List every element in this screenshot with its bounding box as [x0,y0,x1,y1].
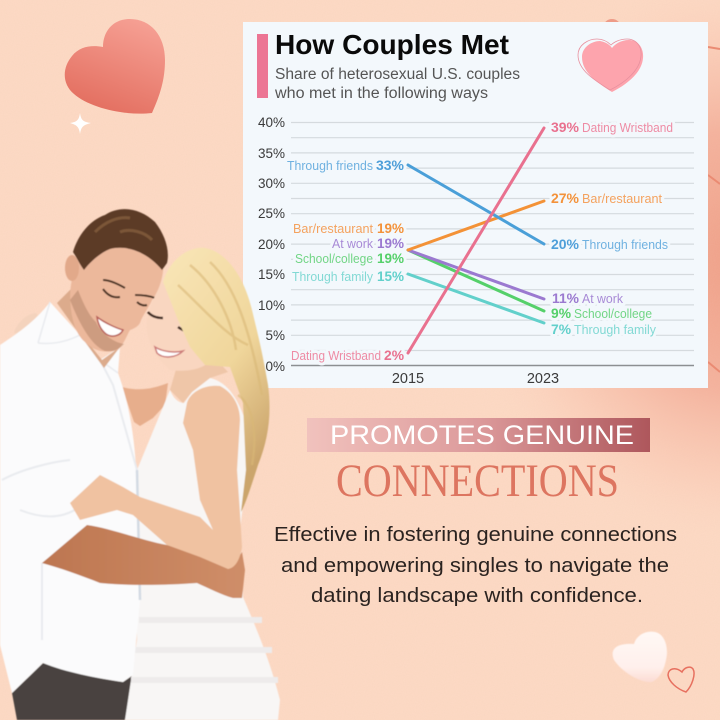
right labels 2023: Dating Wristband [582,120,673,135]
his hair [73,209,168,270]
right labels 2023: At work [582,291,623,306]
x axis labels: 2015 [392,371,424,387]
her arm and hand [70,386,242,569]
her smile [155,347,183,357]
left labels 2015: 19% [377,220,405,236]
right labels 2023: 27% [551,190,580,206]
left labels 2015 [287,157,405,363]
his hair highlight [95,218,152,240]
photo: embracing couple [0,209,280,720]
x axis labels [392,371,559,387]
y axis labels: 40% [258,115,285,130]
body text [274,523,677,607]
left labels 2015: 33% [376,157,405,173]
y axis labels: 35% [258,146,285,161]
left labels 2015: Dating Wristband [291,348,381,363]
x axis labels: 2023 [527,371,559,387]
right labels 2023: 39% [551,119,580,135]
line: through family [408,274,544,323]
shirt shading [2,302,140,640]
chart title: How Couples Met [275,29,509,60]
his smile [97,317,123,336]
y axis labels: 20% [258,237,285,252]
her far arm behind [122,383,168,426]
body text: and empowering singles to navigate the [281,554,669,577]
body text: dating landscape with confidence. [311,584,643,607]
left labels 2015: Through family [292,269,373,284]
line: at work [408,250,544,299]
dress [125,378,280,720]
right labels 2023: 20% [551,236,580,252]
left labels 2015: 19% [377,250,405,266]
her neck [170,358,228,403]
left labels 2015: 19% [377,235,405,251]
trousers [12,663,133,720]
left labels 2015: School/college [295,251,373,266]
icon: outline heart [668,667,694,692]
left labels 2015: Bar/restaurant [293,221,373,236]
line: bar/restaurant [408,201,544,250]
his eyes and brows [103,280,155,305]
her face [147,281,207,371]
her hand on his shoulder [14,313,42,340]
his arm [42,525,245,598]
right labels 2023: Through family [574,322,656,337]
left labels 2015: At work [332,236,373,251]
right labels 2023: Through friends [582,237,668,252]
hair strands [178,262,262,465]
his stubble [70,290,124,351]
her eyes [148,312,188,332]
right labels 2023: Bar/restaurant [582,191,662,206]
icon: pink heart [578,39,643,92]
icon: soft white heart [613,632,667,682]
title accent bar [257,34,268,98]
his ear [65,255,79,281]
y axis labels: 25% [258,206,285,221]
his neck [57,285,120,368]
right labels 2023: School/college [574,306,652,321]
y axis labels: 30% [258,176,285,191]
her hair [163,248,270,512]
chart subtitle [274,66,520,102]
y axis labels: 10% [258,298,285,313]
y axis labels: 5% [265,328,285,343]
y axis labels: 15% [258,267,285,282]
line: school/college [408,250,544,311]
left labels 2015: 15% [377,268,405,284]
his shirt [0,302,140,693]
right labels 2023: 7% [551,321,572,337]
left labels 2015: Through friends [287,158,373,173]
chart subtitle: Share of heterosexual U.S. couples [275,66,520,83]
line: through friends [408,165,544,244]
icon: large coral heart [65,19,165,114]
y axis labels: 0% [265,359,285,374]
right labels 2023: 11% [552,290,580,306]
right labels 2023 [551,119,673,337]
heading: connections: CONNECTIONS [336,455,619,507]
icon: white sparkle [70,113,91,134]
y axis labels [258,115,285,374]
banner: promotes genuine: PROMOTES GENUINE [330,420,634,450]
dress texture [131,620,278,680]
left labels 2015: 2% [384,347,405,363]
line: dating wristband [408,128,544,353]
panel: how couples met chart [243,22,708,388]
his face [70,246,163,351]
chart subtitle: who met in the following ways [274,85,488,102]
right labels 2023: 9% [551,305,572,321]
body text: Effective in fostering genuine connections [274,523,677,546]
